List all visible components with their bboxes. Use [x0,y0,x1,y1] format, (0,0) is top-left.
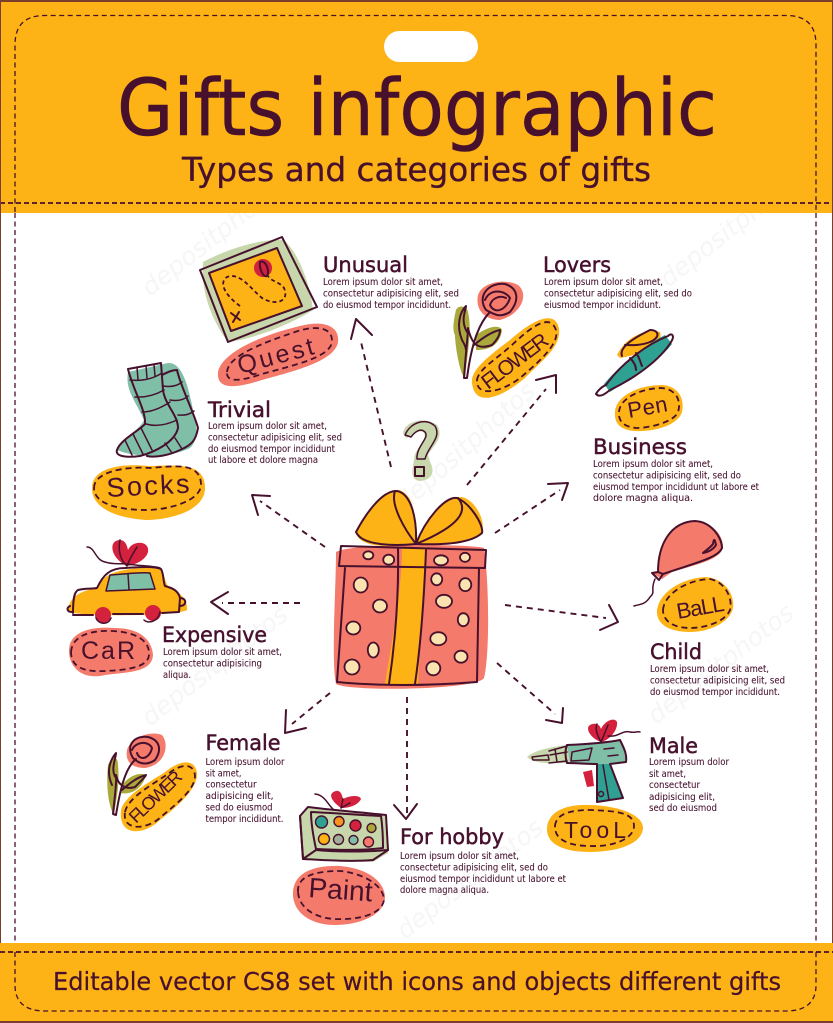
label: tool [547,805,643,852]
text block [206,757,285,825]
text block: Lorem ipsum dolor sit amet, [400,851,519,862]
label: ball: BaLL [675,591,726,624]
icon: treasure map [200,237,317,342]
icon: balloon [634,521,723,606]
panel: lovers [453,253,692,398]
panel: male [527,720,729,852]
text block: do eiusmod tempor incididunt. [650,687,780,698]
text block: consectetur adipisicing elit, sed do [544,288,692,300]
text block [400,851,566,896]
heading: Female [206,731,280,756]
icon: socks [117,363,198,457]
panel: footer band [0,943,833,1023]
text block: sit amet, [206,768,242,780]
text block: sed do eiusmod [649,803,717,814]
label: car [69,628,153,676]
text block [650,664,785,698]
label: car: CaR [81,637,135,665]
text block [163,647,282,681]
text: depositphotos [391,813,548,945]
text block: tempor incididunt. [206,814,284,825]
text block: sit amet, [649,769,686,780]
heading: Trivial [207,398,271,423]
text block: Lorem ipsum dolor sit amet, [544,277,663,288]
arrow: to expensive [211,592,300,614]
label: tool: TooL [564,817,626,843]
text: depositphotos [654,161,811,293]
text block: eiusmod tempor incididunt ut labore et [400,874,566,885]
footer text: Editable vector CS8 set with icons and objects different gifts [53,967,781,996]
text block: consectetur adipisicing elit, sed [650,676,785,686]
text block [593,459,759,504]
text block: do eiusmod tempor incididunt [208,444,335,455]
text: depositphotos [136,600,293,732]
text block: Lorem ipsum dolor sit amet, [208,421,327,432]
text block: consectetur [206,780,257,790]
text block: Lorem ipsum dolor sit amet, [593,459,713,470]
arrow: to female [285,693,330,733]
text block: do eiusmod tempor incididunt. [323,300,451,311]
label: flower: FLOWER [125,767,186,827]
text block: consectetur adipisicing elit, sed do [400,862,548,874]
text block: Lorem ipsum dolor [206,757,285,768]
panel: expensive [68,540,282,681]
heading: Male [649,734,698,759]
text: depositphotos [642,598,799,730]
text block: dolore magna aliqua. [593,493,693,504]
icon: pen [596,330,673,396]
arrow: to trivial [252,495,325,547]
icon: central gift box [334,490,488,689]
arrow: to child [505,605,618,630]
text block: ut labore et dolore magna [208,455,318,466]
heading: Business [593,435,687,460]
text block: adipisicing elit, [649,792,715,803]
text block: eiusmod tempor incididunt ut labore et [593,482,759,493]
title: Gifts infographic [117,64,717,154]
icon: tag hole [384,31,478,62]
label: flower: FLOWER [477,329,553,394]
panel: unusual [200,237,459,386]
text block [208,421,342,466]
text block [649,757,729,814]
icon: question mark [403,420,440,481]
label: ball [657,577,733,632]
icon: car [68,540,187,623]
text block: consectetur adipisicing elit, sed [323,288,459,300]
text block: consectetur adipisicing [163,659,262,670]
text block: adipisicing elit, [206,791,274,802]
heading: Child [650,640,702,665]
arrow: to business [495,483,568,533]
arrow: to for hobby [394,697,417,819]
panel: child [634,521,785,698]
text block: Lorem ipsum dolor sit amet, [163,647,282,658]
heading: Expensive [162,623,267,648]
text block: eiusmod tempor incididunt. [544,300,661,311]
panel: business [593,330,759,504]
icon: rose [107,733,166,815]
text block: Lorem ipsum dolor sit amet, [650,664,769,675]
text block [544,277,692,311]
text block: consectetur adipisicing elit, sed [208,432,342,444]
label: pen: Pen [626,391,669,423]
text block: consectetur adipisicing elit, sed do [593,470,741,482]
text block: Lorem ipsum dolor [649,757,729,768]
label: socks [92,465,205,520]
heading: Unusual [323,253,408,278]
text block: Lorem ipsum dolor sit amet, [323,277,443,288]
icon: rose [453,282,523,378]
text: depositphotos [136,170,293,302]
heading: Lovers [543,253,611,278]
panel: trivial [92,363,342,520]
text block: aliqua. [163,670,191,681]
label: pen [615,385,683,431]
panel: for hobby [293,791,566,925]
panel: female [107,731,285,831]
icon: drill [527,720,640,802]
text: depositphotos [390,376,541,516]
text block [323,277,459,311]
text block: dolore magna aliqua. [400,885,489,896]
label: paint: Paint [308,872,374,907]
text block: consectetur [649,780,700,791]
icon: paint box [300,791,388,862]
arrow: to male [497,663,563,723]
arrow: to unusual [351,319,391,467]
label: paint [293,866,385,925]
label: socks: Socks [106,469,190,503]
heading: For hobby [400,825,504,850]
subtitle: Types and categories of gifts [181,150,651,189]
panel: header band [0,0,833,213]
arrow: to lovers [467,375,556,485]
label: quest: Quest [234,333,317,380]
text block: sed do eiusmod [206,802,273,814]
label: quest [218,324,338,386]
